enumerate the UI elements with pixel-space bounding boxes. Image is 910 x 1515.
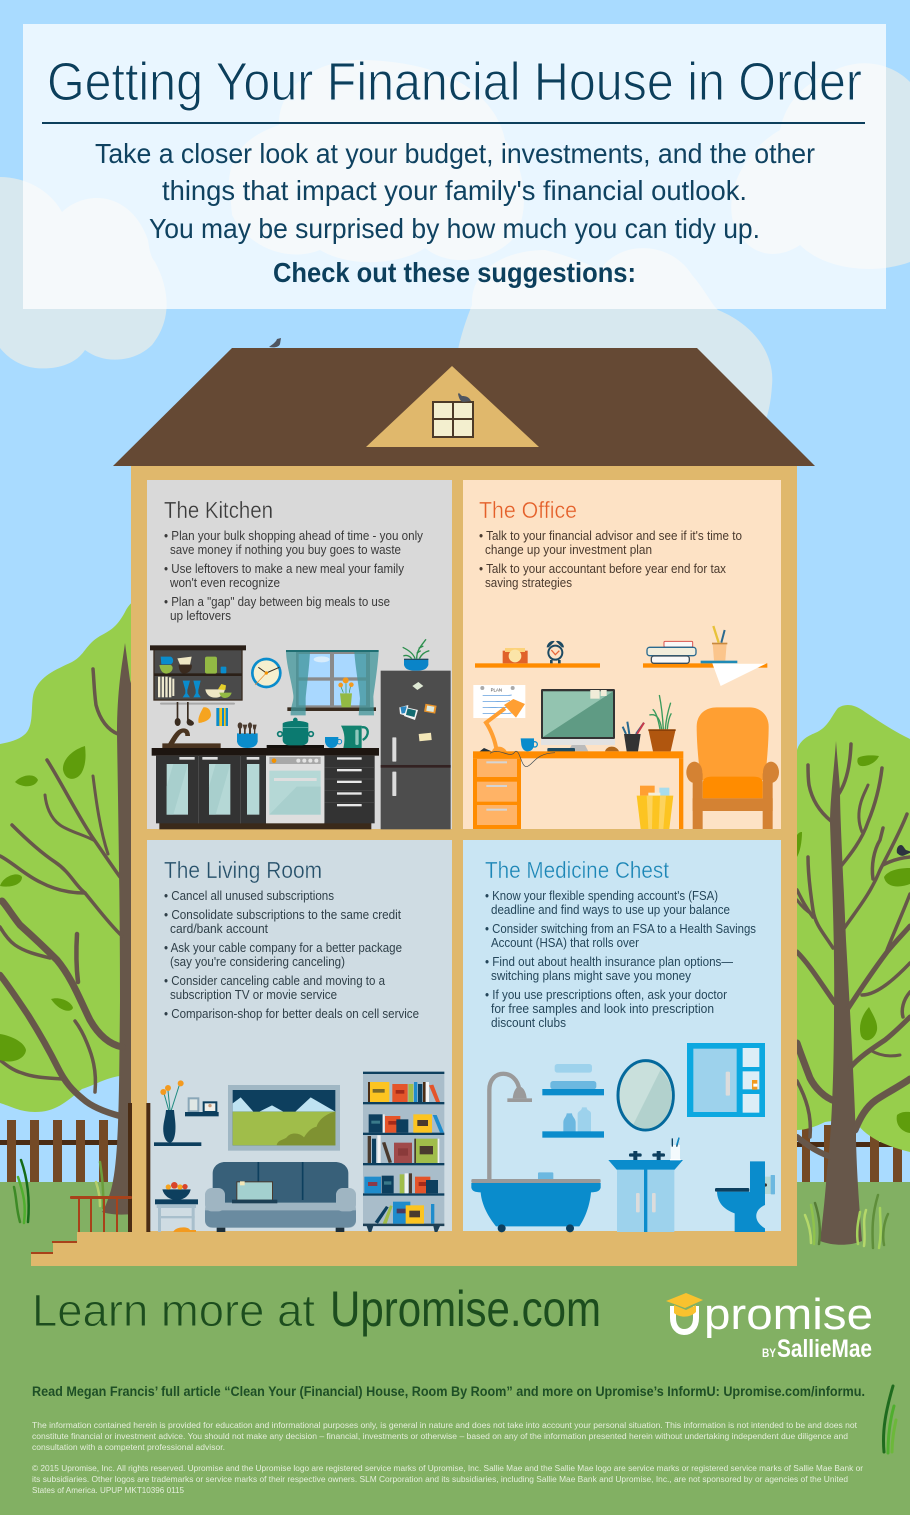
graduation cap bbox=[666, 1293, 703, 1317]
footer headline bbox=[32, 1281, 601, 1337]
shelf 3 books bbox=[368, 1135, 439, 1163]
medicine chest tips: Account (HSA) that rolls over bbox=[491, 936, 639, 950]
logo: Upromise by Sallie Mae: promise bbox=[704, 1290, 873, 1339]
living room tips: subscription TV or movie service bbox=[170, 988, 337, 1002]
living room tips: • Ask your cable company for a better package bbox=[164, 941, 402, 955]
office tips: • Talk to your accountant before year end for tax bbox=[479, 562, 727, 576]
panel: living room bbox=[146, 840, 452, 1232]
medicine chest tips: • Consider switching from an FSA to a Health Savings bbox=[485, 922, 756, 936]
disclaimer: © 2015 Upromise, Inc. All rights reserved. Upromise and the Upromise logo are registered service marks of Upromise, Inc. Sallie Mae and the Sallie Mae logo are service marks or registered service marks of Sallie Mae Bank or bbox=[32, 1463, 863, 1473]
disclaimer: constitute financial or investment advice. You should not make any decision – financial, investments or otherwise – based on any of the information presented herein without undertaking independent due diligence and bbox=[32, 1431, 848, 1441]
porch steps bbox=[31, 1103, 132, 1266]
logo: Upromise by Sallie Mae: SallieMae bbox=[777, 1335, 872, 1363]
kitchen tips: won't even recognize bbox=[169, 576, 280, 590]
pen holder bbox=[623, 722, 644, 751]
flower pot bbox=[338, 677, 354, 707]
books bbox=[647, 641, 696, 663]
heading: medicine chest: The Medicine Chest bbox=[485, 857, 670, 883]
house structure bbox=[113, 338, 815, 1266]
living room tips: card/bank account bbox=[170, 922, 268, 936]
utensil pot bbox=[237, 722, 258, 748]
right fence bbox=[797, 1125, 910, 1182]
kitchen tips: up leftovers bbox=[170, 609, 231, 623]
kitchen tips: save money if nothing you buy goes to waste bbox=[170, 543, 401, 557]
walls bbox=[131, 466, 797, 1266]
monitor bbox=[541, 689, 615, 752]
disclaimer: its subsidiaries. Other logos are trademarks or service marks of their respective owners. SLM Corporation and its subsidiaries, including Sallie Mae Bank and Upromise, Inc., are not sponsored by or agencies of the United bbox=[32, 1474, 848, 1484]
disclaimer: consultation with a competent professional advisor. bbox=[32, 1442, 225, 1452]
plan sheet: PLAN bbox=[491, 687, 502, 692]
railing bbox=[70, 1196, 132, 1232]
medicine chest tips: • Know your flexible spending account's (FSA) bbox=[485, 889, 718, 903]
blue mug bbox=[521, 738, 537, 751]
footer headline: Learn more at bbox=[32, 1285, 315, 1336]
grass tufts bbox=[14, 1160, 888, 1248]
medicine chest tips: discount clubs bbox=[491, 1016, 566, 1030]
armchair bbox=[686, 707, 779, 829]
laptop bbox=[232, 1181, 277, 1203]
footer headline: Upromise.com bbox=[330, 1281, 601, 1337]
medicine chest tips: • Find out about health insurance plan options— bbox=[485, 955, 733, 969]
medicine chest tips: switching plans might save you money bbox=[491, 969, 692, 983]
office tips: • Talk to your financial advisor and see if it's time to bbox=[479, 529, 742, 543]
utensil rail bbox=[160, 702, 235, 726]
office tips bbox=[479, 529, 742, 590]
shelves bbox=[475, 663, 767, 668]
medicine chest tips: for free samples and look into prescription bbox=[491, 1002, 714, 1016]
shelf 4 books bbox=[364, 1173, 438, 1193]
medicine chest tips: • If you use prescriptions often, ask your doctor bbox=[485, 988, 727, 1002]
intro text: Take a closer look at your budget, investments, and the other bbox=[95, 138, 815, 169]
desk bbox=[473, 751, 683, 829]
living room tips: • Consolidate subscriptions to the same credit bbox=[164, 908, 401, 922]
medicine chest tips: deadline and find ways to use up your balance bbox=[491, 903, 730, 917]
counter and cabinets bbox=[152, 748, 379, 829]
office tips: change up your investment plan bbox=[485, 543, 652, 557]
sofa bbox=[205, 1162, 356, 1232]
wall shelf with dishes bbox=[150, 645, 246, 700]
heading: kitchen: The Kitchen bbox=[164, 497, 273, 523]
vase with flowers bbox=[154, 1080, 201, 1146]
header panel bbox=[23, 24, 886, 309]
magnets bbox=[399, 682, 437, 741]
window with curtains bbox=[286, 650, 379, 715]
right tree bbox=[797, 705, 910, 1245]
office tips: saving strategies bbox=[485, 576, 572, 590]
potted plant bbox=[648, 695, 676, 751]
bathroom illustration bbox=[471, 1043, 775, 1232]
mirror bbox=[618, 1061, 673, 1130]
disclaimer bbox=[32, 1420, 863, 1495]
fridge bbox=[381, 671, 451, 829]
attic window bbox=[432, 401, 474, 438]
shelf 5 books bbox=[375, 1202, 434, 1224]
sink and faucet bbox=[162, 728, 221, 748]
left fence bbox=[0, 1120, 125, 1182]
panel: office bbox=[463, 480, 781, 829]
kitchen tips bbox=[164, 529, 424, 623]
living room tips bbox=[164, 889, 419, 1021]
shower pipe and head bbox=[489, 1074, 532, 1182]
towel shelves bbox=[542, 1064, 604, 1138]
office illustration bbox=[473, 626, 779, 829]
kitchen tips: • Plan your bulk shopping ahead of time - you only bbox=[164, 529, 424, 543]
disclaimer: The information contained herein is provided for education and informational purposes only, is general in nature and does not take into account your personal situation. This information is not intended to be and does not bbox=[32, 1420, 858, 1430]
disclaimer: States of America. UPUP MKT10396 0115 bbox=[32, 1485, 184, 1495]
kitchen tips: • Use leftovers to make a new meal your family bbox=[164, 562, 405, 576]
toothbrush cup bbox=[670, 1138, 681, 1160]
heading: living room: The Living Room bbox=[164, 857, 322, 883]
shelf 2 books bbox=[369, 1114, 444, 1133]
bookcase bbox=[363, 1072, 444, 1232]
sink cabinet bbox=[608, 1151, 683, 1232]
intro text bbox=[95, 138, 815, 244]
plan sheet bbox=[473, 685, 525, 718]
bird on right tree bbox=[897, 845, 910, 856]
medicine cabinet bbox=[687, 1043, 765, 1117]
call to action: Check out these suggestions: bbox=[273, 257, 636, 288]
living room tips: (say you're considering canceling) bbox=[170, 955, 345, 969]
paper airplane note bbox=[712, 663, 767, 686]
clouds bbox=[0, 60, 910, 450]
shelf 1 books bbox=[368, 1082, 440, 1102]
grass tuft in footer bbox=[883, 1386, 896, 1453]
alarm clock bbox=[547, 641, 564, 663]
oven bbox=[266, 756, 324, 823]
wastebasket bbox=[637, 786, 673, 829]
mouse pad bbox=[605, 747, 619, 751]
living room illustration bbox=[146, 1072, 444, 1232]
intro text: things that impact your family's financial outlook. bbox=[162, 175, 747, 206]
logo: Upromise by Sallie Mae bbox=[666, 1290, 873, 1363]
living room tips: • Comparison-shop for better deals on cell service bbox=[164, 1007, 419, 1021]
left tree bbox=[0, 602, 133, 1215]
bathtub bbox=[471, 1172, 601, 1232]
door frame edge bbox=[146, 1103, 150, 1232]
panel: medicine chest bbox=[463, 840, 781, 1232]
article reference line: Read Megan Francis’ full article “Clean Your (Financial) House, Room By Room” and more on Upromise’s InformU: Upromise.com/informu. bbox=[32, 1384, 865, 1399]
kitchen illustration bbox=[150, 639, 451, 829]
cooktop and pot bbox=[267, 718, 324, 748]
gable bbox=[366, 366, 539, 447]
logo: Upromise by Sallie Mae: BY bbox=[762, 1346, 776, 1360]
picture frames bbox=[185, 1097, 219, 1116]
wall clock bbox=[251, 658, 282, 688]
birds on roof bbox=[269, 338, 471, 402]
landscape painting bbox=[228, 1085, 340, 1151]
intro text: You may be surprised by how much you can tidy up. bbox=[149, 213, 760, 244]
side table with fruit bbox=[155, 1182, 198, 1232]
lamp cable bbox=[490, 751, 555, 767]
cup and kettle bbox=[325, 726, 368, 748]
desk lamp bbox=[479, 699, 525, 754]
camera bbox=[503, 648, 528, 663]
plant on fridge bbox=[403, 639, 429, 671]
medicine chest tips bbox=[485, 889, 756, 1030]
pencil cup bbox=[701, 626, 737, 663]
roof bbox=[113, 348, 815, 466]
panel: kitchen bbox=[147, 480, 452, 829]
living room tips: • Cancel all unused subscriptions bbox=[164, 889, 334, 903]
heading: office: The Office bbox=[479, 497, 577, 523]
toilet bbox=[715, 1161, 775, 1232]
kitchen tips: • Plan a "gap" day between big meals to use bbox=[164, 595, 390, 609]
U letter bbox=[673, 1306, 696, 1332]
lawn and footer background bbox=[0, 1182, 910, 1515]
living room tips: • Consider canceling cable and moving to a bbox=[164, 974, 385, 988]
